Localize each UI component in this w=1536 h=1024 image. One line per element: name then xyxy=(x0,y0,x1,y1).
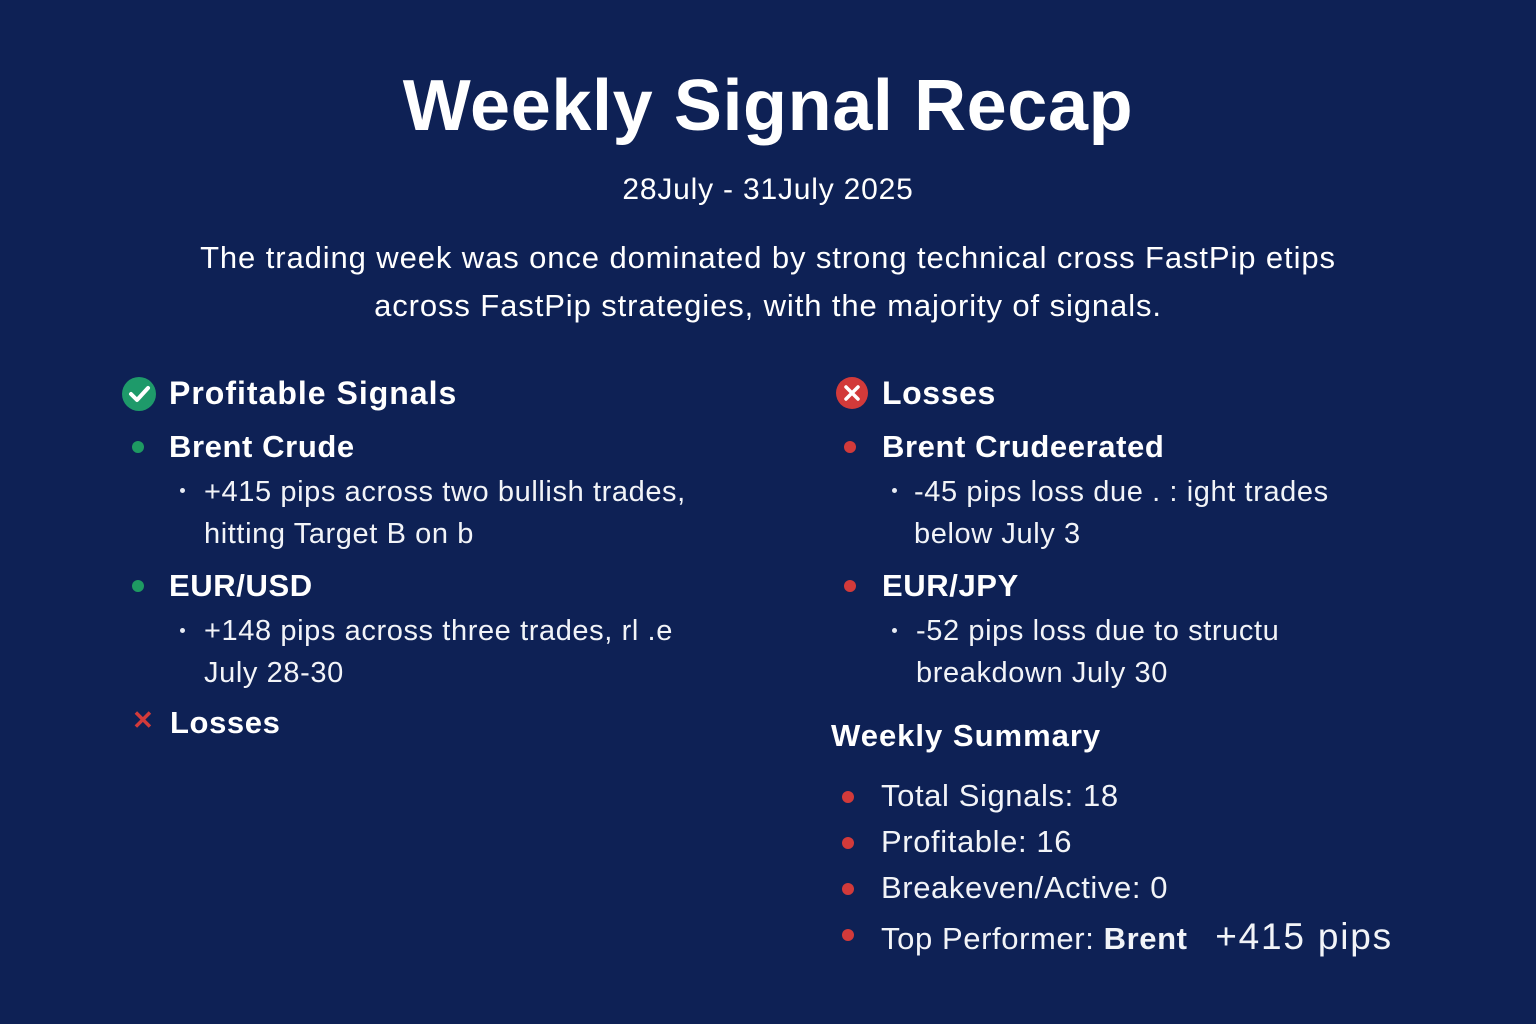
intro paragraph: across FastPip strategies, with the majority of signals. xyxy=(374,288,1162,323)
heading: Profitable Signals xyxy=(169,375,457,411)
panel: profitable signals: Losses xyxy=(170,705,280,740)
panel: losses: -45 pips loss due . : ight trades xyxy=(914,476,1329,508)
title: Weekly Signal Recap xyxy=(403,66,1133,146)
item: eur/jpy: EUR/JPY xyxy=(882,568,1019,603)
summary list: Profitable: 16 xyxy=(881,824,1072,859)
panel: profitable signals xyxy=(122,375,686,740)
panel: losses: breakdown July 30 xyxy=(916,657,1168,689)
intro paragraph xyxy=(200,240,1336,323)
item: brent crude: Brent Crude xyxy=(169,429,355,464)
item: eur/usd: EUR/USD xyxy=(169,568,313,603)
panel: profitable signals: +415 pips across two bullish trades, xyxy=(204,476,686,508)
panel: profitable signals: +148 pips across three trades, rl .e xyxy=(204,615,673,647)
item: brent crude: Brent Crudeerated xyxy=(882,429,1164,464)
intro paragraph: The trading week was once dominated by strong technical cross FastPip etips xyxy=(200,240,1336,275)
heading: Weekly Summary xyxy=(831,718,1101,753)
heading: Losses xyxy=(882,375,996,411)
panel: losses: below July 3 xyxy=(914,518,1081,550)
summary list: Total Signals: 18 xyxy=(881,778,1119,813)
panel: losses xyxy=(836,375,1329,689)
icon: check xyxy=(122,377,156,411)
panel: profitable signals: July 28-30 xyxy=(204,657,344,689)
summary list: Breakeven/Active: 0 xyxy=(881,870,1168,905)
summary list xyxy=(842,778,1393,957)
icon: x xyxy=(836,377,868,409)
panel: profitable signals: hitting Target B on b xyxy=(204,518,474,550)
date: 28July - 31July 2025 xyxy=(622,173,914,206)
panel: weekly summary xyxy=(831,718,1393,957)
summary list: Top Performer: Brent +415 pips xyxy=(881,916,1393,957)
panel: losses: -52 pips loss due to structu xyxy=(916,615,1279,647)
losses label: ✕ xyxy=(132,705,154,735)
